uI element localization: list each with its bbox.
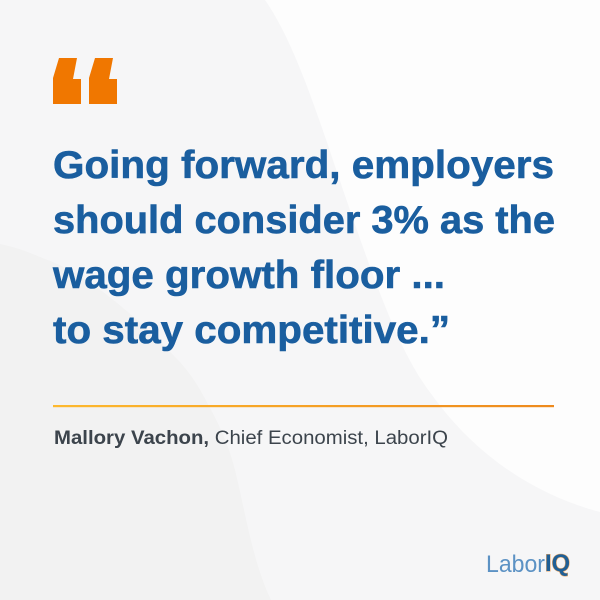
attribution: Mallory Vachon, Chief Economist, LaborIQ [54,428,448,449]
logo: LaborIQ: Labor [486,551,545,578]
quote text: Going forward, employers [53,144,554,187]
logo: LaborIQ: IQ [545,550,570,577]
quote text: wage growth floor ... [52,254,445,297]
background shape: white top right [265,0,600,512]
quote text: to stay competitive.” [53,309,450,352]
background shape: darker bottom left [0,244,271,600]
quote text: should consider 3% as the [53,199,555,242]
divider rule [53,405,554,407]
icon: opening quotation mark [53,58,117,104]
quote text [52,144,555,352]
